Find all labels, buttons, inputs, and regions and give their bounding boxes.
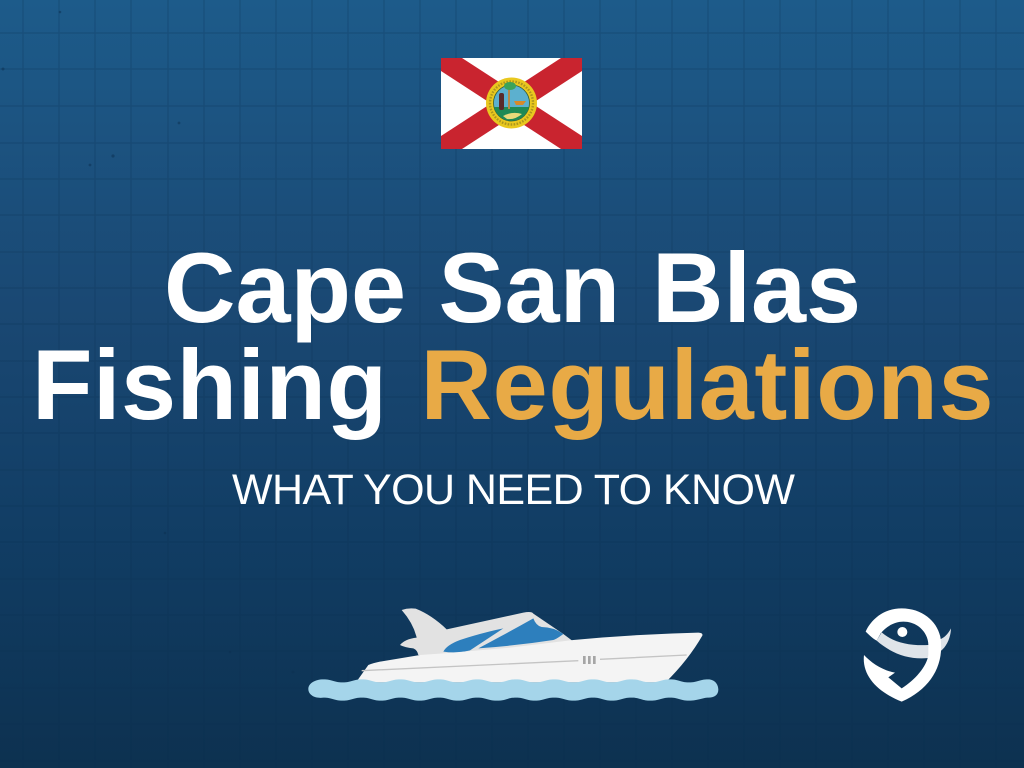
title line 1: Blas <box>652 232 861 343</box>
logo body <box>864 608 941 702</box>
icon: white yacht on waves <box>308 608 718 701</box>
title line 2: Fishing <box>32 329 387 440</box>
title <box>32 232 994 440</box>
boat hull <box>356 633 702 682</box>
subtitle: WHAT YOU NEED TO KNOW <box>232 466 795 514</box>
highlighted word: Regulations <box>420 329 994 440</box>
logo eye <box>897 627 907 637</box>
logo band and tail <box>877 628 951 658</box>
icon: Florida state flag <box>441 58 582 149</box>
title line 1: San <box>438 232 620 343</box>
boat windows <box>478 618 563 648</box>
waves <box>308 679 718 701</box>
icon: fish hook logo <box>864 608 951 702</box>
boat cabin <box>400 608 573 658</box>
title line 1: Cape <box>164 232 406 343</box>
